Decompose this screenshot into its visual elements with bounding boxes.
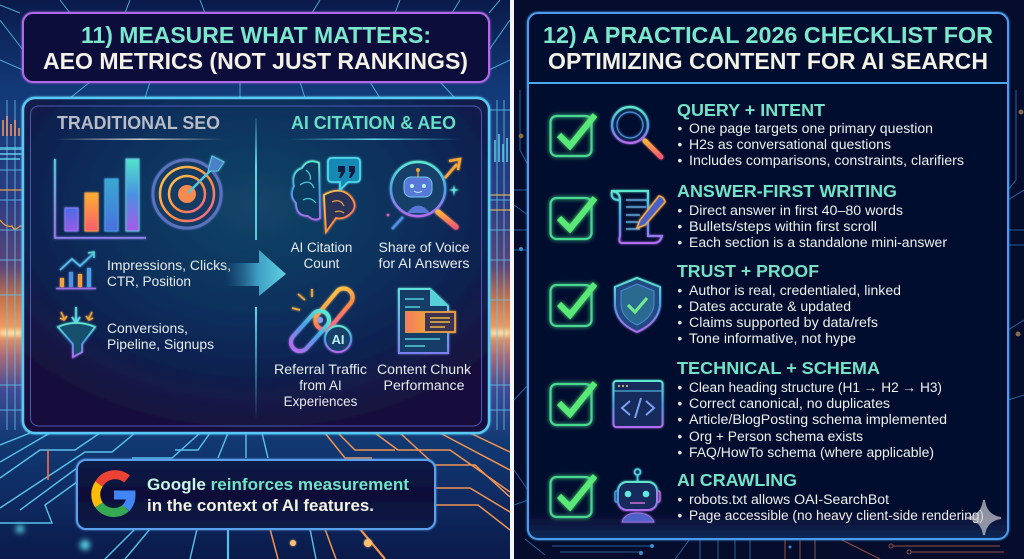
bullet list: Each section is a standalone mini-answer — [689, 235, 948, 250]
bullet list: • — [678, 235, 682, 250]
panel: checklist, slide 12 — [528, 13, 1008, 539]
label: share of voice: for AI Answers — [378, 256, 470, 271]
bullet list: • — [678, 492, 682, 507]
column heading: AI citation and AEO: AI CITATION & AEO — [291, 112, 456, 133]
bullet list: • — [678, 508, 682, 523]
bullet list: Page accessible (no heavy client-side rendering) — [689, 508, 984, 523]
bullet list: Clean heading structure (H1 → H2 → H3) — [689, 380, 942, 395]
heading line 2: OPTIMIZING CONTENT FOR AI SEARCH — [548, 48, 988, 74]
bullet list: • — [678, 380, 682, 395]
bullet list: Includes comparisons, constraints, clarifiers — [689, 153, 964, 168]
section heading: QUERY + INTENT — [677, 100, 825, 120]
right background: dark circuit board — [514, 0, 1024, 559]
label: referral traffic: from AI — [299, 378, 342, 393]
bullet list — [678, 283, 901, 346]
icon: bar chart — [54, 159, 146, 239]
bullet list: H2s as conversational questions — [689, 137, 891, 152]
bullet list: • — [678, 121, 682, 136]
icon: checkbox — [550, 476, 595, 517]
icon: scroll and pencil — [612, 191, 665, 243]
metric: AI citation count — [291, 158, 360, 271]
bullet list: Article/BlogPosting schema implemented — [689, 412, 947, 427]
icon: shield — [615, 278, 660, 332]
left background: neon circuit scene — [0, 0, 510, 559]
section heading: ANSWER-FIRST WRITING — [677, 181, 897, 201]
icon: robot in magnifier — [387, 159, 460, 229]
bullet list — [678, 203, 948, 250]
section: query + intent — [550, 100, 964, 168]
label: conversions metrics: Conversions, — [107, 321, 188, 336]
label: AI citation count: AI Citation — [291, 240, 352, 255]
callout: Google note — [77, 460, 435, 529]
bullet list: Direct answer in first 40–80 words — [689, 203, 903, 218]
bullet list: • — [678, 331, 682, 346]
icon: brain with quote bubble — [292, 158, 360, 232]
icon: Google G — [96, 475, 131, 513]
icon: funnel — [58, 307, 95, 357]
icon: robot — [615, 469, 660, 522]
icon: checkbox — [550, 383, 595, 425]
bullet list — [678, 380, 947, 460]
column heading: traditional SEO: TRADITIONAL SEO — [57, 112, 220, 133]
icon: target with arrow — [153, 156, 224, 228]
label: share of voice: Share of Voice — [378, 240, 470, 255]
bullet list: Correct canonical, no duplicates — [689, 396, 890, 411]
section: AI crawling — [550, 469, 984, 523]
heading line 1: 12) A PRACTICAL 2026 CHECKLIST FOR — [543, 22, 993, 48]
bullet list: • — [678, 429, 682, 444]
icon: checkbox — [550, 115, 595, 156]
bullet list: • — [678, 219, 682, 234]
arrow: traditional to AI — [224, 250, 286, 296]
bullet list: • — [678, 445, 682, 460]
divider between the two slides — [510, 0, 514, 559]
icon: mini growth chart — [56, 252, 96, 288]
bullet list — [678, 492, 984, 523]
bullet list: Org + Person schema exists — [689, 429, 863, 444]
section: trust + proof — [550, 261, 901, 346]
bullet list — [678, 121, 964, 168]
metric: impressions row — [56, 252, 231, 289]
bullet list: • — [678, 203, 682, 218]
panel: metrics comparison — [23, 98, 489, 433]
bullet list: • — [678, 412, 682, 427]
label: impressions metrics: Impressions, Clicks, — [107, 258, 231, 273]
heading line 1: 11) MEASURE WHAT MATTERS: — [81, 22, 431, 48]
callout text: Google reinforces measurement — [147, 475, 409, 494]
label: referral traffic: Referral Traffic — [274, 362, 367, 377]
panel: title banner, slide 11 — [23, 13, 489, 82]
icon: document with highlighted chunk — [399, 289, 455, 353]
metric: share of voice — [378, 159, 470, 271]
bullet list: One page targets one primary question — [689, 121, 933, 136]
section heading: AI CRAWLING — [677, 470, 797, 490]
label: referral traffic: Experiences — [284, 394, 358, 409]
section: technical + schema — [550, 358, 947, 460]
bullet list: • — [678, 299, 682, 314]
heading line 2: AEO METRICS (NOT JUST RANKINGS) — [43, 48, 468, 74]
metric: content chunk — [377, 289, 471, 393]
bullet list: Author is real, credentialed, linked — [689, 283, 901, 298]
icon: checkbox — [550, 198, 595, 239]
bullet list: • — [678, 396, 682, 411]
label: AI badge: AI — [332, 332, 344, 347]
bullet list: Bullets/steps within first scroll — [689, 219, 877, 234]
bullet list: FAQ/HowTo schema (where applicable) — [689, 445, 934, 460]
section: answer-first writing — [550, 181, 948, 250]
icon: sparkle watermark — [967, 500, 1001, 535]
bullet list: • — [678, 137, 682, 152]
callout: Google note: in the context of AI features. — [147, 496, 374, 515]
icon: magnifier — [612, 107, 661, 157]
bullet list: • — [678, 153, 682, 168]
metric: conversions row — [58, 307, 214, 357]
section heading: TRUST + PROOF — [677, 261, 819, 281]
bullet list: • — [678, 315, 682, 330]
bullet list: Tone informative, not hype — [689, 331, 856, 346]
icon: code window — [614, 381, 662, 427]
section heading: TECHNICAL + SCHEMA — [677, 358, 880, 378]
metric: referral traffic — [274, 285, 367, 409]
label: impressions metrics: CTR, Position — [107, 274, 191, 289]
icon: checkbox — [550, 284, 595, 326]
bullet list: • — [678, 283, 682, 298]
label: conversions metrics: Pipeline, Signups — [107, 337, 214, 352]
bullet list: Claims supported by data/refs — [689, 315, 878, 330]
label: AI citation count: Count — [304, 256, 340, 271]
bullet list: Dates accurate & updated — [689, 299, 851, 314]
bullet list: robots.txt allows OAI-SearchBot — [689, 492, 889, 507]
label: content chunk: Content Chunk — [377, 362, 471, 377]
label: content chunk: Performance — [384, 378, 464, 393]
